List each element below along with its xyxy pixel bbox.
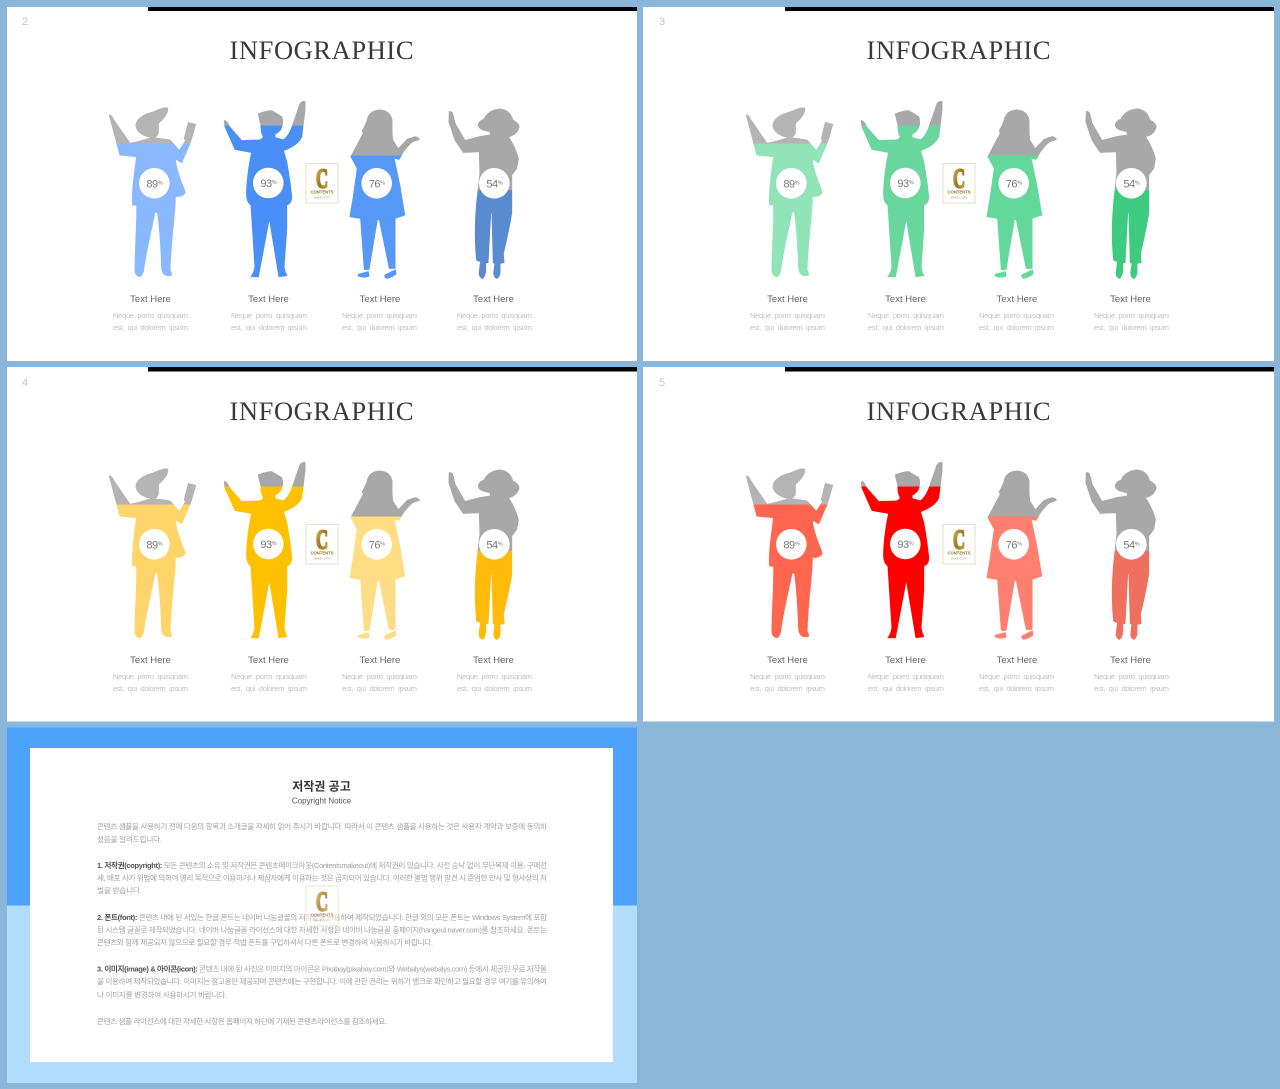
figure 89%: 89 [783, 539, 795, 551]
figure 89%: % [795, 541, 800, 547]
caption 2 [231, 655, 307, 693]
logo: CONTENTS [947, 190, 971, 194]
caption 3: est, qui dolorem ipsum [979, 684, 1054, 693]
panel: blue slide 2 [7, 7, 637, 361]
caption 4: est, qui dolorem ipsum [457, 323, 532, 332]
caption 4: Neque porro quisquam [457, 311, 532, 320]
caption 3: Neque porro quisquam [979, 311, 1054, 320]
caption 3 [979, 655, 1054, 693]
caption 3: Text Here [997, 294, 1037, 305]
caption 1 [750, 655, 825, 693]
section 2: font: 2. 폰트(font): 콘텐츠 내에 된 서있는 한글 폰트는 네이버 나눔글꼴의 저작물을 사용하여 제작되었습니다. 한글 외의 모든 폰트는 Windows System에 포함 [97, 912, 547, 922]
figure 54%: % [1135, 541, 1140, 547]
caption 3: est, qui dolorem ipsum [342, 323, 417, 332]
section 2: font: 콘텐츠와 함께 제공되지 않으므로 필요할 경우 적법 폰트를 구입하셔서 다른 폰트로 변경하여 사용하시기 바랍니다. [97, 937, 433, 947]
logo: C [953, 524, 965, 555]
logo: MAKE COPY [314, 556, 330, 560]
figure 89%: 89 [783, 178, 795, 190]
section 1: copyright: 벌을 받습니다. [97, 885, 142, 895]
caption 1: Neque porro quisquam [113, 672, 188, 681]
caption 4: Text Here [1110, 655, 1151, 666]
figure 89% [746, 469, 833, 638]
figure 76%: 76 [369, 539, 380, 551]
page number 3: 3 [659, 16, 665, 28]
figure 54%: 54 [486, 539, 498, 551]
figure 54%: % [1135, 180, 1140, 186]
caption 1 [750, 294, 825, 332]
caption 2 [868, 655, 944, 693]
heading: INFOGRAPHIC [866, 396, 1050, 426]
caption 1: est, qui dolorem ipsum [750, 323, 825, 332]
heading: INFOGRAPHIC [866, 35, 1050, 65]
figure 54%: % [498, 180, 503, 186]
caption 1: est, qui dolorem ipsum [750, 684, 825, 693]
figure 89%: % [795, 180, 800, 186]
caption 2: Text Here [248, 655, 289, 666]
figure 93% [861, 462, 942, 638]
caption 1: Text Here [130, 294, 171, 305]
figure 76%: % [1017, 180, 1022, 186]
figure 89% [746, 108, 833, 277]
caption 2: Text Here [885, 294, 926, 305]
caption 3 [342, 655, 417, 693]
page number 2: 2 [22, 16, 28, 28]
logo [306, 886, 338, 926]
figure 54% [1086, 470, 1156, 639]
figure 89%: % [158, 180, 163, 186]
caption 1: est, qui dolorem ipsum [113, 684, 188, 693]
caption 2: est, qui dolorem ipsum [231, 684, 307, 693]
panel: green slide 3 [643, 7, 1274, 361]
caption 3: Neque porro quisquam [979, 672, 1054, 681]
caption 4 [1094, 294, 1169, 332]
logo: C [953, 163, 965, 194]
caption 4 [457, 294, 532, 332]
caption 3: Neque porro quisquam [342, 672, 417, 681]
figure 76%: % [380, 541, 385, 547]
caption 4: Neque porro quisquam [1094, 311, 1169, 320]
figure 93% [861, 101, 942, 277]
page number 4: 4 [22, 377, 28, 389]
caption 3: Text Here [997, 655, 1037, 666]
panel: red slide 5 [643, 367, 1274, 722]
figure 89%: 89 [146, 178, 158, 190]
section 3: image and icon: 을 이용하여 제작되었습니다. 이미지는 참고용만 제공되며 콘텐츠에는 구현합니다. 이에 관한 권리는 위하기 뱅크로 확인하고 필요할 경우 여기를 유의하여 [97, 976, 547, 986]
figure 76%: 76 [1006, 539, 1017, 551]
logo: C [316, 886, 328, 917]
logo: CONTENTS [310, 550, 334, 556]
section 1: copyright: 세, 배포 사기 위법에 의하여 영리 목적으로 이용하거나 제삼자에게 이용하는 것은 금지되어 있습니다. 이러한 불법 행위 발견 시 준엄한 민사 및 형사상의 처 [97, 872, 547, 882]
caption 1: Neque porro quisquam [113, 311, 188, 320]
logo [943, 524, 975, 564]
figure 76% [350, 110, 419, 278]
logo: CONTENTS [310, 912, 334, 918]
figure 89% [109, 108, 196, 277]
logo: C [316, 163, 328, 194]
caption 2: est, qui dolorem ipsum [868, 684, 944, 693]
caption 2: est, qui dolorem ipsum [231, 323, 307, 332]
caption 2: Text Here [885, 655, 926, 666]
intro paragraph: 콘텐츠 샘플을 사용하기 전에 다음의 항목과 소개글을 자세히 읽어 주시기 바랍니다. 따라서 이 콘텐츠 샘플을 사용하는 것은 사용자 계약과 보증에 동의하 [97, 821, 547, 831]
caption 2: est, qui dolorem ipsum [868, 323, 944, 332]
caption 2 [231, 294, 307, 332]
figure 54% [1086, 109, 1156, 278]
closing note: 콘텐츠 샘플 라이선스에 대한 자세한 사항은 홈페이지 하단에 기재된 콘텐츠라이선스를 참조하세요. [97, 1016, 387, 1026]
figure 93% [224, 462, 305, 638]
logo [306, 163, 338, 203]
intro paragraph [97, 821, 547, 844]
caption 1: Neque porro quisquam [750, 672, 825, 681]
panel: yellow slide 4 [7, 367, 637, 722]
caption 4: Text Here [1110, 294, 1151, 305]
intro paragraph: 셨음을 알려드립니다. [97, 834, 162, 844]
section 3: image and icon: 나 이미지를 변경하여 사용하시기 바랍니다. [97, 990, 227, 1000]
logo: MAKE COPY [314, 196, 330, 200]
logo: MAKE COPY [951, 556, 967, 560]
section 1: copyright: 1. 저작권(copyright): 모든 콘텐츠의 소유 및 저작권은 콘텐츠메이크아웃(Contentsmakeout)에 저작권이 있습니다. 사전 승낙 없이 무단복제 이용, 구매전 [97, 860, 547, 870]
figure 76% [350, 471, 419, 639]
caption 4 [457, 655, 532, 693]
logo: MAKE COPY [314, 918, 330, 922]
caption 4 [1094, 655, 1169, 693]
caption 3: est, qui dolorem ipsum [979, 323, 1054, 332]
caption 2 [868, 294, 944, 332]
figure 76%: % [380, 180, 385, 186]
figure 76% [987, 471, 1056, 639]
heading: INFOGRAPHIC [230, 396, 414, 426]
logo: C [316, 524, 328, 555]
panel: copyright notice slide [7, 728, 637, 1083]
caption 1: est, qui dolorem ipsum [113, 323, 188, 332]
caption 1: Text Here [767, 294, 808, 305]
caption 4: Text Here [473, 294, 514, 305]
logo: MAKE COPY [951, 196, 967, 200]
figure 54% [449, 470, 519, 639]
caption 4: est, qui dolorem ipsum [1094, 323, 1169, 332]
caption 4: Neque porro quisquam [1094, 672, 1169, 681]
figure 76%: 76 [1006, 178, 1017, 190]
caption 4: est, qui dolorem ipsum [457, 684, 532, 693]
caption 2: Text Here [248, 294, 289, 305]
figure 54%: % [498, 541, 503, 547]
figure 89%: % [158, 541, 163, 547]
figure 76%: 76 [369, 178, 380, 190]
section 2: font: 된 시스템 글꼴로 제작되었습니다. 네이버 나눔글꼴 라이선스에 대한 자세한 사항은 네이버 나눔글꼴 홈페이지(hangeul.naver.com)를 참조하세요. 폰트는 [97, 924, 547, 934]
caption 3: Text Here [360, 655, 400, 666]
heading: INFOGRAPHIC [230, 35, 414, 65]
figure 76% [987, 110, 1056, 278]
caption 3 [342, 294, 417, 332]
caption 2: Neque porro quisquam [868, 311, 944, 320]
figure 93%: % [272, 180, 277, 186]
caption 1 [113, 655, 188, 693]
figure 76%: % [1017, 541, 1022, 547]
page number 5: 5 [659, 377, 665, 389]
notice title: 저작권 공고 [292, 778, 351, 794]
figure 93% [224, 101, 305, 277]
figure 93%: % [909, 541, 914, 547]
section 3: image and icon: 3. 이미지(image) & 아이콘(icon): 콘텐츠 내에 된 사진은 이미지의 아이콘은 Pixabay(pixabay.com)와 Webalys(webalys.com) 등에서 제공된 무료 저작물 [97, 964, 547, 974]
figure 93%: 93 [897, 178, 909, 190]
section 2: font [97, 912, 547, 947]
figure 54%: 54 [486, 178, 498, 190]
logo [306, 524, 338, 564]
figure 54% [449, 109, 519, 278]
figure 89%: 89 [146, 539, 158, 551]
caption 3: Neque porro quisquam [342, 311, 417, 320]
caption 3: est, qui dolorem ipsum [342, 684, 417, 693]
caption 1: Text Here [767, 655, 808, 666]
caption 2: Neque porro quisquam [868, 672, 944, 681]
caption 4: Neque porro quisquam [457, 672, 532, 681]
figure 93%: % [272, 541, 277, 547]
caption 1: Neque porro quisquam [750, 311, 825, 320]
caption 2: Neque porro quisquam [231, 672, 307, 681]
caption 4: est, qui dolorem ipsum [1094, 684, 1169, 693]
section 1: copyright [97, 860, 547, 895]
caption 1: Text Here [130, 655, 171, 666]
section 3: image and icon [97, 964, 547, 1000]
caption 3: Text Here [360, 294, 400, 305]
figure 54%: 54 [1123, 178, 1135, 190]
logo: CONTENTS [947, 550, 971, 556]
figure 93%: 93 [260, 178, 272, 190]
figure 93%: % [909, 180, 914, 186]
figure 54%: 54 [1123, 539, 1135, 551]
caption 3 [979, 294, 1054, 332]
figure 93%: 93 [897, 539, 909, 551]
logo [943, 163, 975, 203]
notice subtitle: Copyright Notice [292, 796, 352, 806]
caption 1 [113, 294, 188, 332]
logo: CONTENTS [310, 190, 334, 194]
caption 4: Text Here [473, 655, 514, 666]
figure 89% [109, 469, 196, 638]
caption 2: Neque porro quisquam [231, 311, 307, 320]
figure 93%: 93 [260, 539, 272, 551]
